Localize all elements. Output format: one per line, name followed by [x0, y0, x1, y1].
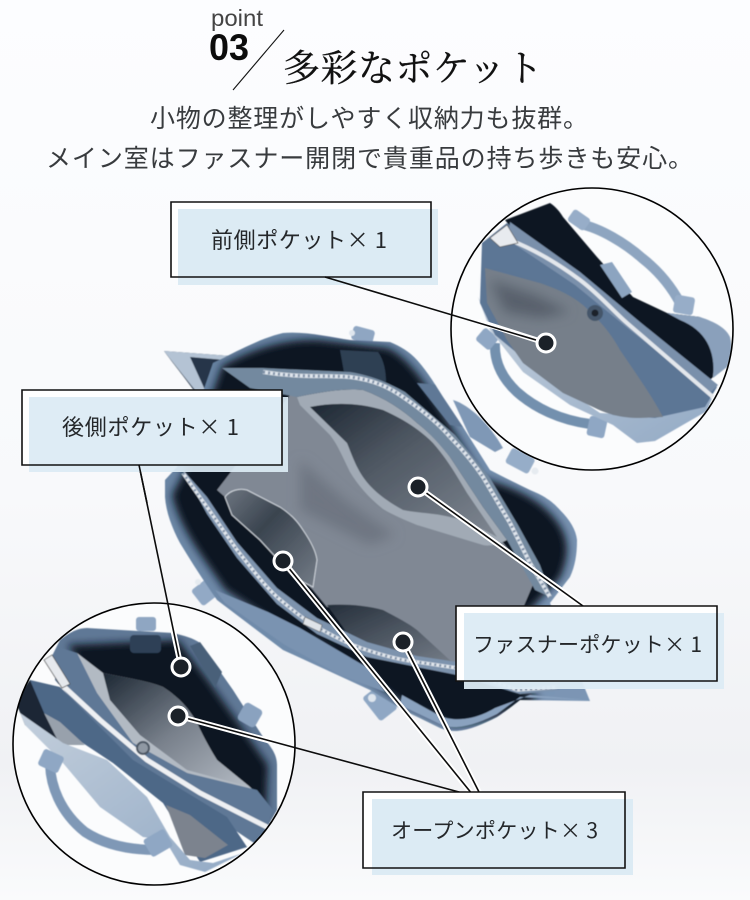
- callout: front pocket: [171, 202, 555, 352]
- intro text: メイン室はファスナー開閉で貴重品の持ち歩きも安心。: [46, 145, 693, 173]
- circle background: [13, 603, 295, 885]
- circle outline: [451, 188, 733, 470]
- handle strap: [600, 262, 632, 298]
- dark left wall: [15, 680, 60, 745]
- upper pocket: trim: [297, 389, 507, 545]
- front panel strip: [215, 590, 385, 692]
- pocket opening: [103, 673, 250, 787]
- callout: open pocket: オープンポケット× 3: [391, 815, 598, 845]
- bottom rim: [400, 695, 588, 727]
- flap light edge: [164, 351, 231, 390]
- bag interior: [172, 340, 588, 727]
- snap button: [587, 305, 603, 321]
- zipper pull: [303, 617, 322, 632]
- marker: zipper pocket: [409, 478, 427, 496]
- pocket lining: [77, 653, 267, 803]
- upper handle: [580, 224, 680, 303]
- upper zipper: [263, 372, 550, 597]
- lower zipper band: [183, 470, 560, 694]
- circle inset: front pocket: [451, 188, 733, 470]
- zipper pull: [44, 655, 70, 688]
- bottom panel rim: [478, 297, 712, 443]
- inner blue band: [55, 647, 273, 832]
- callout: front pocket: 前側ポケット× 1: [211, 223, 387, 255]
- circle outline: [13, 603, 295, 885]
- right strap inside: [417, 383, 463, 427]
- handle: [50, 762, 157, 850]
- icon: left buckle: [191, 574, 225, 606]
- lower zipper: [183, 473, 557, 690]
- gray lower pocket: [166, 805, 228, 858]
- upper pocket: opening: [310, 404, 497, 537]
- lower pocket: [327, 605, 453, 663]
- back wall: [504, 202, 714, 380]
- heading: point label: point: [211, 5, 264, 31]
- intro text: 小物の整理がしやすく収納力も抜群。: [150, 105, 588, 133]
- lower buckles: [475, 327, 608, 439]
- lower blue band: [30, 680, 247, 862]
- gray pocket: [485, 268, 663, 418]
- lower-left pocket: [225, 489, 317, 587]
- heading: number: 03: [209, 27, 249, 68]
- circle inset: back pocket: [13, 603, 295, 885]
- bag silhouette: [165, 333, 590, 731]
- marker: back pocket: [172, 658, 190, 676]
- magnet flap: [130, 635, 161, 653]
- dark interior shading: [172, 340, 567, 726]
- leader casings: [172, 322, 583, 792]
- top tab: [136, 617, 156, 631]
- back wall: [50, 628, 277, 845]
- bag floor: [217, 395, 535, 670]
- callout: zipper pocket: [456, 606, 724, 689]
- circle background: [451, 188, 733, 470]
- lower handle: [495, 343, 590, 424]
- pocket shade: [490, 280, 570, 318]
- leader strokes: [139, 465, 583, 792]
- back wall rim: [667, 313, 731, 378]
- callout: back pocket: [22, 390, 288, 503]
- zipper pull: [490, 225, 518, 247]
- upper zipper teeth: [263, 372, 550, 597]
- icon: top handle tab: [349, 325, 375, 345]
- heading: slash: [233, 30, 284, 90]
- marker: open pocket left: [274, 552, 292, 570]
- callout: zipper pocket: ファスナーポケット× 1: [473, 629, 702, 659]
- front panel: [20, 713, 243, 872]
- intro text: [46, 105, 693, 173]
- gray lower pocket: left: [42, 712, 85, 745]
- floor shade: [300, 467, 388, 544]
- left flap: [164, 351, 240, 395]
- central bag photo: [164, 325, 590, 731]
- icon: bottom buckle: [362, 684, 398, 722]
- marker: open pocket bottom: [394, 633, 412, 651]
- zipper: [510, 240, 713, 397]
- right tab: [236, 701, 264, 729]
- circle photo: [15, 617, 277, 872]
- marker: open pocket inset: [169, 707, 187, 725]
- upper band: [222, 368, 552, 598]
- title: 多彩なポケット: [283, 48, 543, 90]
- snap button: [137, 742, 149, 754]
- upper buckles: [567, 209, 695, 316]
- zipper: [60, 683, 267, 827]
- circle photo: [475, 203, 731, 443]
- leader lines: [139, 322, 583, 792]
- back-side lining strip: [508, 222, 718, 393]
- right flap: [190, 642, 222, 688]
- lower zipper teeth: [183, 473, 557, 690]
- back wall flap: [340, 350, 386, 382]
- icon: right handle strap: [453, 400, 538, 474]
- blue inner panel: [480, 223, 717, 418]
- back wall shade: [68, 640, 268, 815]
- marker dots: [169, 478, 427, 725]
- callout: open pocket: [363, 792, 633, 875]
- callout: back pocket: 後側ポケット× 1: [62, 410, 239, 442]
- buckles: [37, 748, 173, 858]
